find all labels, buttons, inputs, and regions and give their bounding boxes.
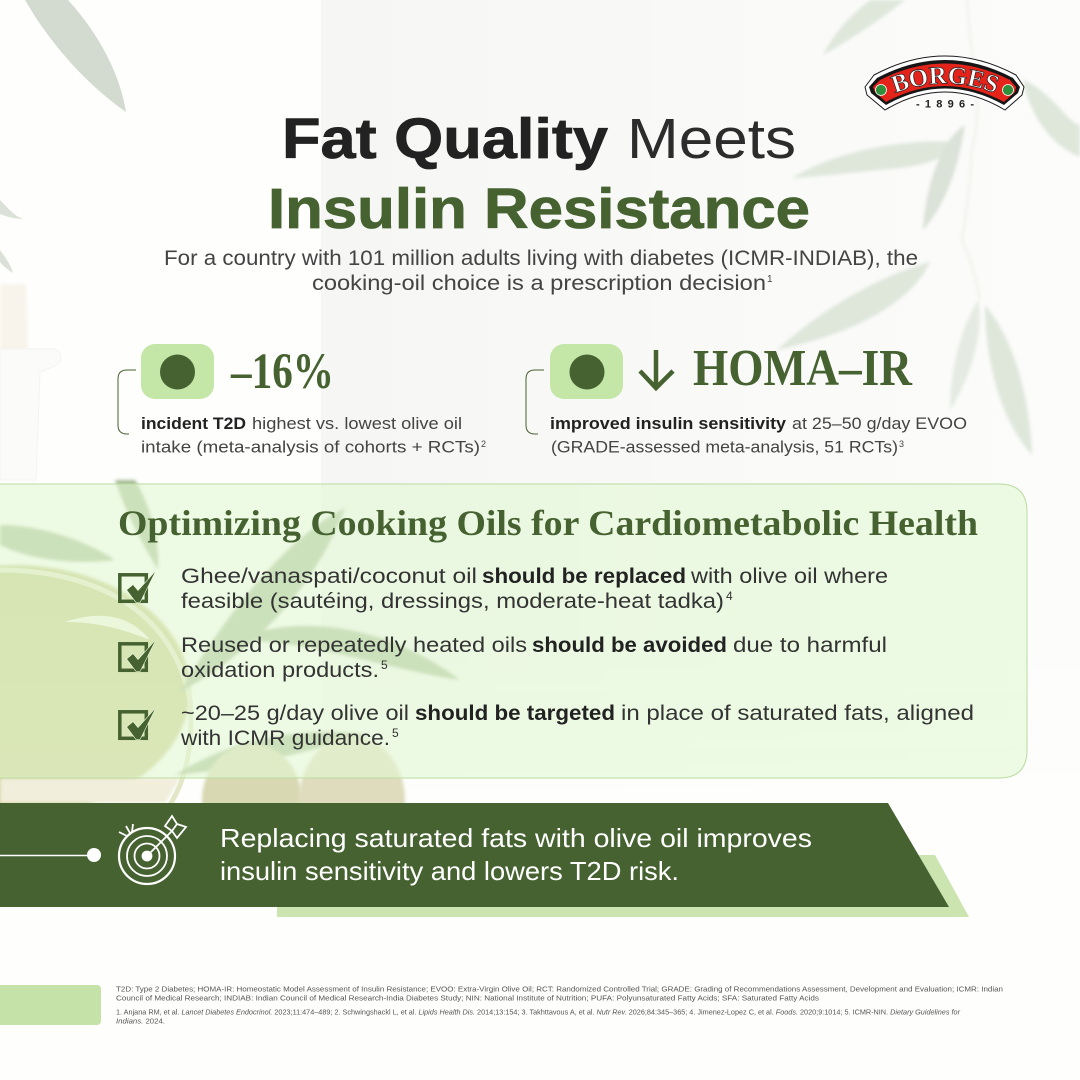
item text (181, 565, 888, 613)
banner text: Replacing saturated fats with olive oil improves (220, 823, 812, 853)
item text: with ICMR guidance. (180, 727, 390, 750)
stat description: at 25–50 g/day EVOO (792, 414, 967, 433)
icon: down arrow (640, 350, 673, 388)
stat description: incident T2D (141, 414, 246, 433)
item text: ~20–25 g/day olive oil (181, 702, 409, 725)
icon: target with arrow (119, 816, 186, 884)
stat description: (GRADE-assessed meta-analysis, 51 RCTs) (551, 438, 898, 456)
footnotes: T2D: Type 2 Diabetes; HOMA-IR: Homeostatic Model Assessment of Insulin Resistance; EVOO: Extra-Virgin Olive Oil; RCT: Randomized Controlled Trial; GRADE: Grading of Recommendations Assessment, Development and Evaluation; ICMR: Indian (116, 986, 1003, 994)
logo: Borges 1896: BORGES (890, 67, 999, 94)
item text: 4 (726, 589, 733, 603)
stat description: improved insulin sensitivity (550, 414, 787, 433)
footer accent bar (0, 985, 101, 1025)
stat value: –16% (230, 344, 334, 400)
item text: with olive oil where (690, 565, 888, 588)
subtitle: For a country with 101 million adults living with diabetes (ICMR-INDIAB), the (164, 247, 918, 270)
item text: should be avoided (532, 634, 727, 657)
item text: 5 (381, 658, 388, 672)
cork (0, 284, 28, 437)
connector line and dot (0, 848, 101, 862)
title: Meets (627, 107, 796, 171)
footnotes (116, 986, 1003, 1026)
icon: badge (141, 344, 214, 399)
item 1 (120, 565, 888, 613)
bottle base below panel (0, 778, 180, 803)
banner: takeaway (0, 803, 969, 917)
stat description (550, 414, 967, 456)
footnotes: 1. Anjana RM, et al. Lancet Diabetes Endocrinol. 2023;11:474–489; 2. Schwingshackl L, et al. Lipids Health Dis. 2014;13:154; 3. Takhttavous A, et al. Nutr Rev. 2026;84:345–365; 4. Jimenez-Lopez C, et al. Foods. 2020;9:1014; 5. ICMR-NIN. Dietary Guidelines for (116, 1010, 961, 1016)
background photo wash (0, 0, 1080, 803)
item text: in place of saturated fats, aligned (621, 702, 974, 725)
subtitle: cooking-oil choice is a prescription decision (312, 272, 766, 295)
panel heading: Optimizing Cooking Oils for Cardiometabolic Health (118, 503, 978, 543)
stat: -16% incident T2D (118, 344, 486, 456)
banner text: insulin sensitivity and lowers T2D risk. (220, 856, 679, 886)
item 2 (120, 634, 887, 682)
stat value: HOMA–IR (693, 340, 913, 397)
stat: HOMA-IR (526, 340, 967, 456)
item text (180, 702, 974, 750)
subtitle: 1 (767, 274, 773, 285)
olive leaves behind panel (0, 480, 460, 775)
stat description: 2 (481, 439, 486, 449)
banner text (220, 823, 812, 886)
title: Fat Quality (282, 107, 608, 171)
item text: should be targeted (415, 702, 615, 725)
icon: checkbox (120, 709, 155, 739)
logo: Borges 1896 (864, 56, 1024, 111)
icon: checkbox (120, 641, 155, 671)
item text: oxidation products. (181, 659, 379, 682)
icon: checkbox (120, 572, 155, 602)
stat description (141, 414, 486, 456)
leaf top-left (25, 0, 126, 112)
oil highlight (65, 616, 150, 640)
stat description: highest vs. lowest olive oil (252, 414, 462, 433)
blurred leaves top-right (777, 0, 1080, 455)
title: Insulin Resistance (268, 177, 810, 241)
logo: Borges 1896: -1896- (916, 98, 974, 110)
item text: Ghee/vanaspati/coconut oil (181, 565, 477, 588)
item text: 5 (392, 726, 399, 740)
item text: due to harmful (733, 634, 887, 657)
icon: badge (550, 344, 623, 399)
bottle neck (0, 349, 61, 480)
footnotes: Council of Medical Research; INDIAB: Indian Council of Medical Research-India Diabetes Study; NIN: National Institute of Nutrition; PUFA: Polyunsaturated Fatty Acids; SFA: Saturated Fatty Acids (116, 996, 820, 1002)
olives (202, 744, 302, 856)
item 3 (120, 702, 974, 750)
title (268, 107, 810, 241)
panel: optimizing cooking oils (0, 484, 1027, 778)
stat description: intake (meta-analysis of cohorts + RCTs) (141, 438, 480, 456)
item text (181, 634, 887, 682)
footnotes: Indians. 2024. (116, 1018, 165, 1026)
item text: Reused or repeatedly heated oils (181, 634, 527, 657)
subtitle (164, 247, 918, 295)
item text: feasible (sautéing, dressings, moderate-heat tadka) (181, 590, 724, 613)
stat description: 3 (899, 439, 904, 449)
bottle body with oil (0, 565, 190, 815)
item text: should be replaced (482, 565, 686, 588)
